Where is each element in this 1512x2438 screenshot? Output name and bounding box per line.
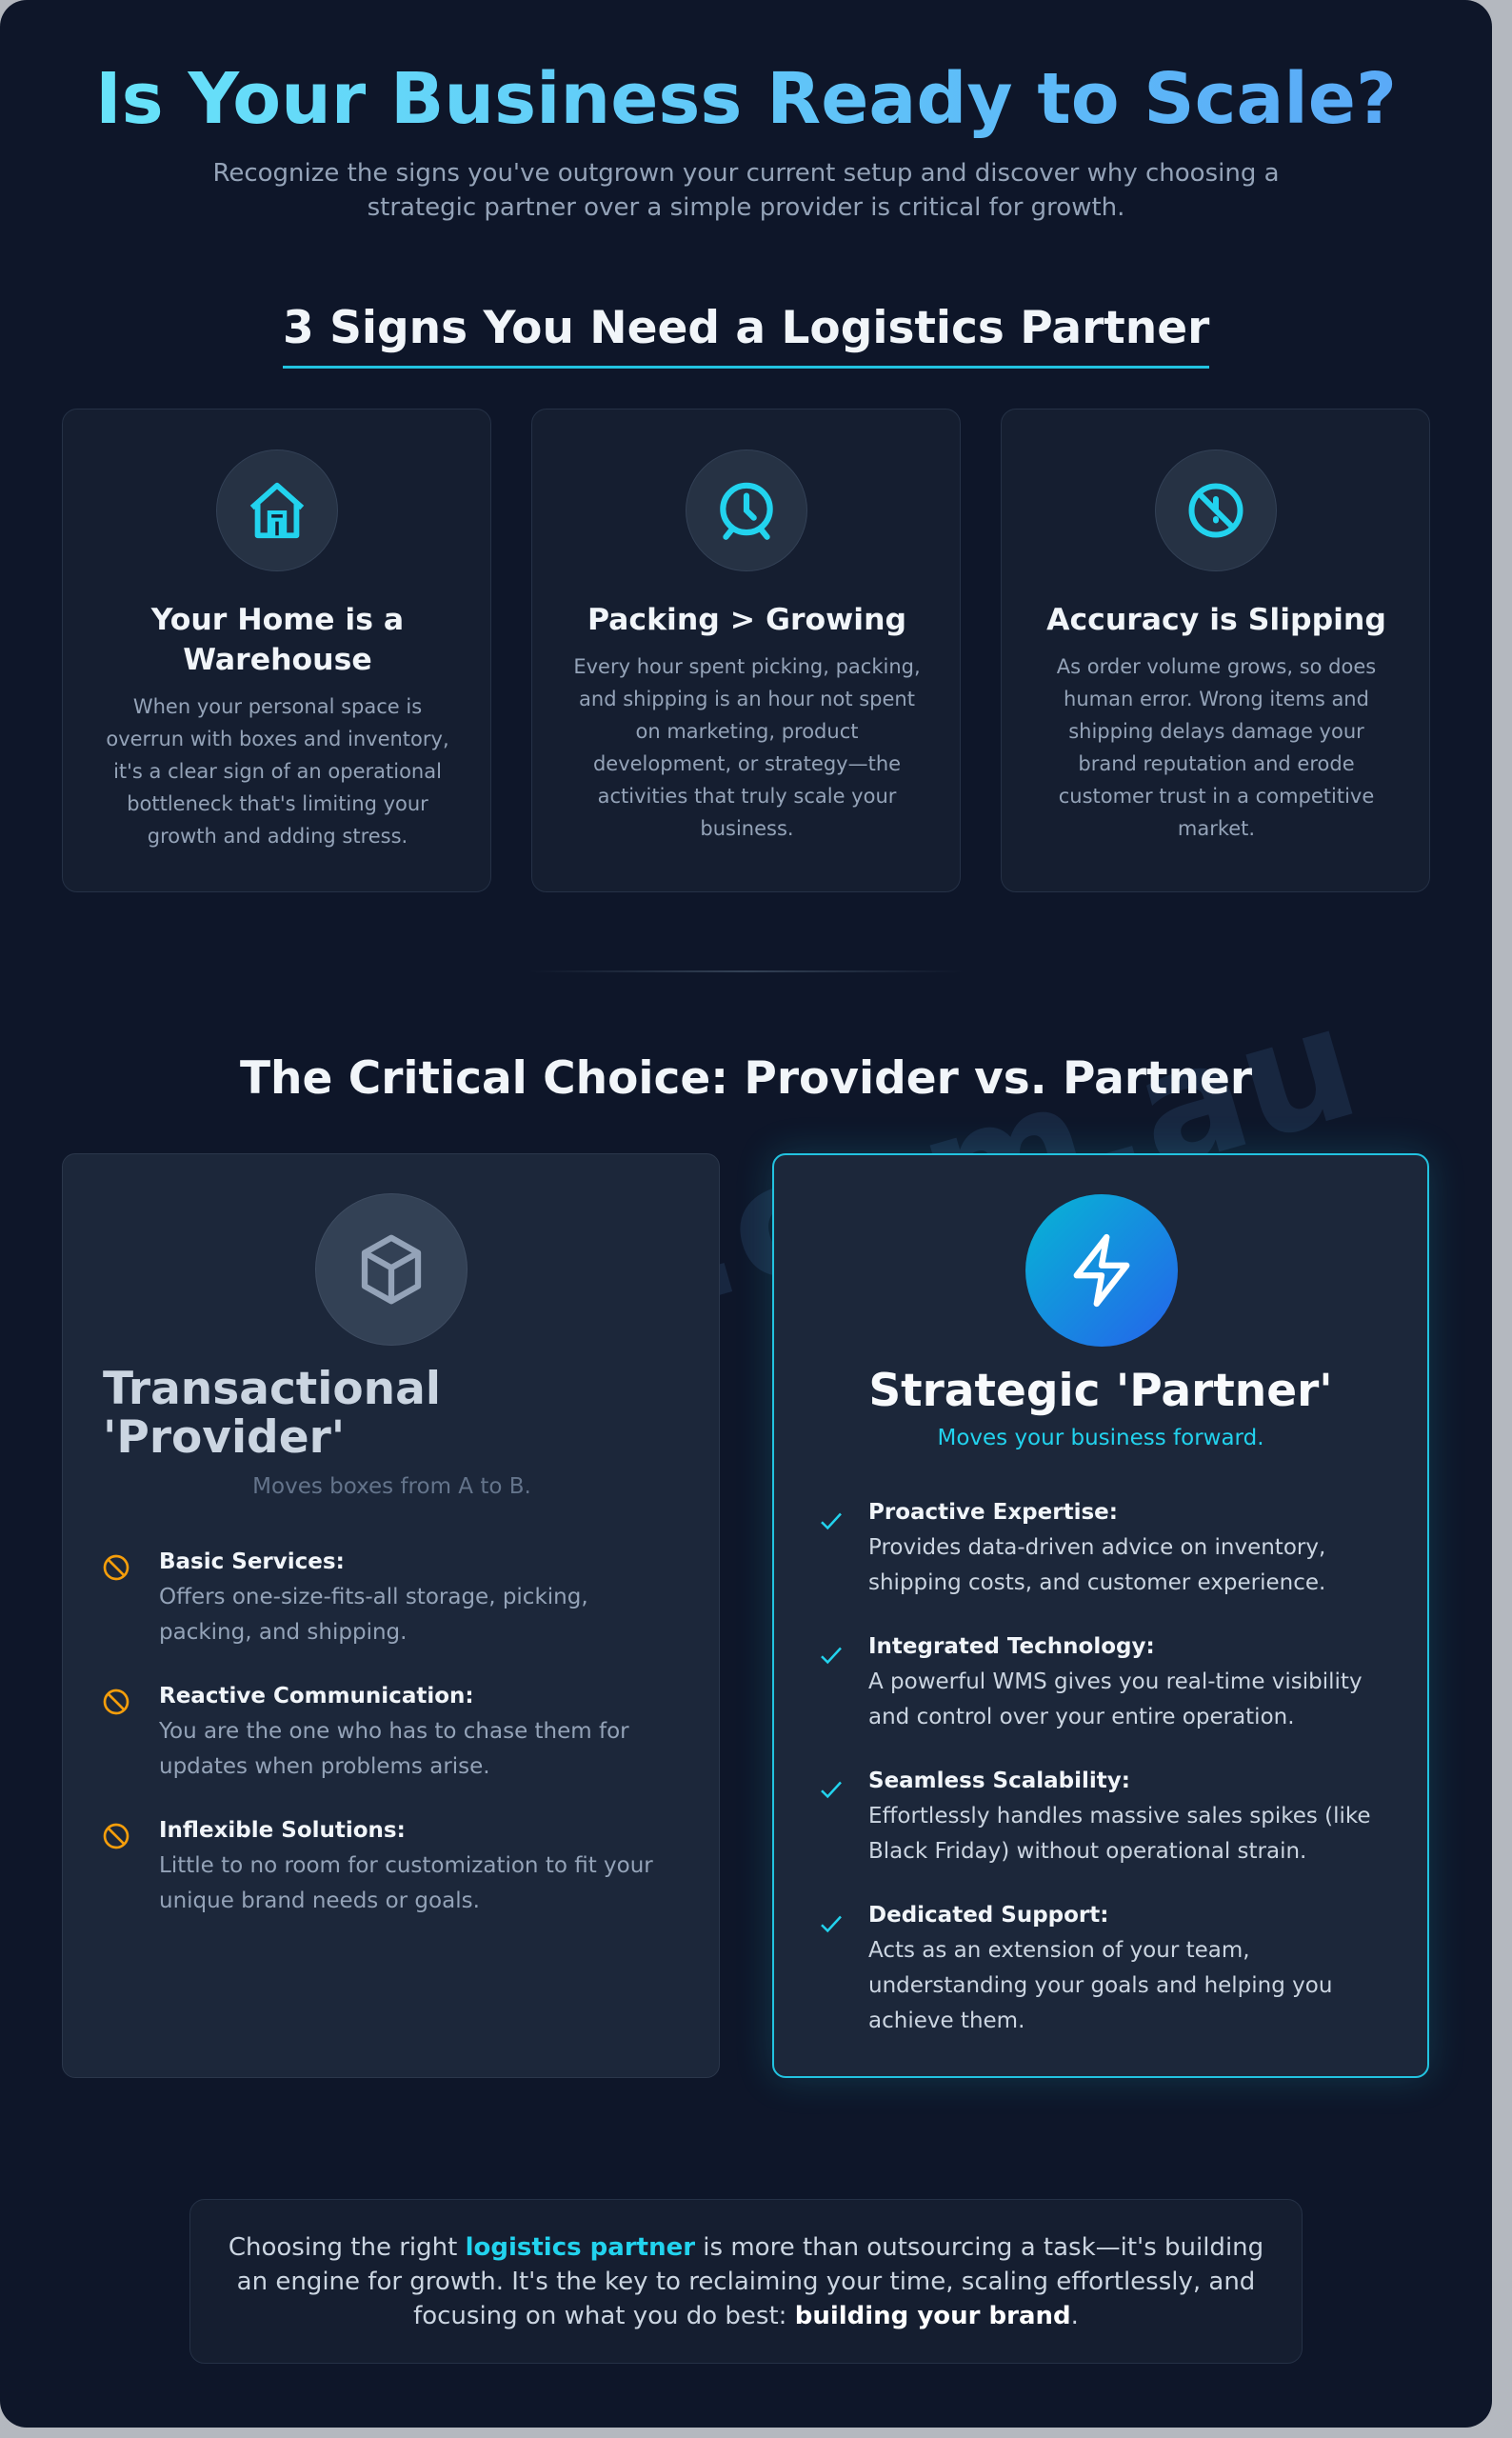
item: support: understanding your goals and helping you (868, 1973, 1332, 1998)
callout: conclusion (189, 2199, 1303, 2364)
item: support: Acts as an extension of your team, (868, 1938, 1250, 1963)
card text (573, 655, 921, 840)
subtitle (212, 159, 1280, 222)
item: integrated tech: Integrated Technology: (868, 1634, 1155, 1659)
item: proactive: Provides data-driven advice on inventory, (868, 1535, 1325, 1560)
icon: slash circle (1155, 450, 1277, 571)
panel subtitle: Moves your business forward. (937, 1426, 1264, 1450)
card title: Accuracy is Slipping (1046, 603, 1386, 637)
item: reactive: Reactive Communication: (159, 1684, 474, 1709)
item: basic services: Basic Services: (159, 1549, 345, 1574)
item: inflexible: Inflexible Solutions: (159, 1818, 406, 1843)
panel subtitle: Moves boxes from A to B. (252, 1474, 531, 1499)
item: proactive: shipping costs, and customer experience. (868, 1570, 1325, 1595)
item: integrated tech: and control over your entire operation. (868, 1705, 1295, 1729)
card text: it's a clear sign of an operational (113, 760, 442, 783)
icon: clock (686, 450, 807, 571)
item: reactive: You are the one who has to chase them for (159, 1719, 629, 1744)
item: basic services: packing, and shipping. (159, 1620, 407, 1645)
item: basic services: Offers one-size-fits-all storage, picking, (159, 1585, 588, 1609)
item: scalability: Effortlessly handles massive sales spikes (like (868, 1804, 1371, 1828)
card title: Warehouse (183, 643, 372, 677)
watermark: .com.au (650, 969, 1376, 1339)
item: scalability: Black Friday) without operational strain. (868, 1839, 1306, 1864)
panel: partner (772, 1153, 1429, 2078)
card text: overrun with boxes and inventory, (106, 728, 449, 750)
card text (106, 695, 449, 848)
item: proactive (821, 1500, 1325, 1595)
card title (150, 603, 404, 677)
card text: shipping delays damage your (1068, 720, 1364, 743)
item: inflexible (103, 1818, 653, 1913)
item: basic services (103, 1549, 588, 1645)
icon: box (315, 1193, 468, 1346)
item: support: Dedicated Support: (868, 1903, 1108, 1928)
panel: provider (62, 1153, 720, 2078)
heading: critical choice: The Critical Choice: Provider vs. Partner (240, 1052, 1252, 1105)
card text: business. (700, 817, 794, 840)
card text (1057, 655, 1376, 840)
item: support: achieve them. (868, 2008, 1025, 2033)
callout: conclusion: focusing on what you do best: building your brand. (413, 2302, 1079, 2330)
item: reactive: updates when problems arise. (159, 1754, 490, 1779)
item: inflexible: Little to no room for customization to fit your (159, 1853, 653, 1878)
card text: bottleneck that's limiting your (127, 792, 428, 815)
card text: As order volume grows, so does (1057, 655, 1376, 678)
callout: conclusion: Choosing the right logistics partner is more than outsourcing a task—it's building (229, 2233, 1263, 2262)
item: integrated tech: A powerful WMS gives you real-time visibility (868, 1669, 1363, 1694)
card text: activities that truly scale your (598, 785, 896, 808)
item: reactive (103, 1684, 629, 1779)
panel title: Strategic 'Partner' (868, 1365, 1333, 1417)
icon: house (216, 450, 338, 571)
item: support (821, 1903, 1332, 2033)
title: Is Your Business Ready to Scale? (95, 58, 1397, 140)
card text: development, or strategy—the (593, 752, 901, 775)
item: scalability: Seamless Scalability: (868, 1769, 1130, 1793)
heading: 3 signs: 3 Signs You Need a Logistics Partner (283, 302, 1209, 354)
item: scalability (821, 1769, 1371, 1864)
card text: Every hour spent picking, packing, (573, 655, 921, 678)
panel title (103, 1363, 441, 1464)
card text: When your personal space is (133, 695, 422, 718)
card text: brand reputation and erode (1078, 752, 1355, 775)
card text: customer trust in a competitive (1059, 785, 1374, 808)
card text: growth and adding stress. (148, 825, 408, 848)
item: integrated tech (821, 1634, 1363, 1729)
subtitle: Recognize the signs you've outgrown your current setup and discover why choosing a (212, 159, 1280, 188)
card: home warehouse (62, 409, 491, 892)
item: proactive: Proactive Expertise: (868, 1500, 1118, 1525)
card text: on marketing, product (636, 720, 858, 743)
list: provider items (103, 1549, 653, 1913)
card title: Packing > Growing (587, 603, 906, 637)
list: partner items (821, 1500, 1371, 2033)
card: accuracy (1001, 409, 1430, 892)
icon: lightning (1025, 1194, 1178, 1347)
card: packing > growing (531, 409, 961, 892)
item: inflexible: unique brand needs or goals. (159, 1888, 480, 1913)
card text: market. (1178, 817, 1255, 840)
card text: human error. Wrong items and (1064, 688, 1369, 710)
card text: and shipping is an hour not spent (579, 688, 915, 710)
callout: conclusion: an engine for growth. It's the key to reclaiming your time, scaling effortlessly, and (237, 2268, 1255, 2296)
subtitle: strategic partner over a simple provider is critical for growth. (368, 193, 1124, 222)
panel title: Transactional (103, 1363, 441, 1415)
card title: Your Home is a (151, 603, 404, 637)
panel title: 'Provider' (103, 1411, 345, 1464)
